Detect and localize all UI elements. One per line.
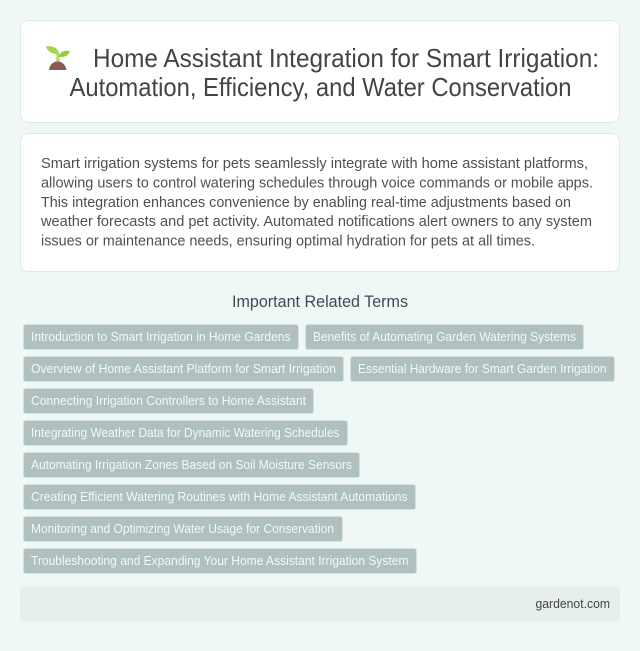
- chip: connecting controllers: Connecting Irrigation Controllers to Home Assistant: [31, 393, 306, 408]
- chip: irrigation zones: Automating Irrigation Zones Based on Soil Moisture Sensors: [31, 457, 352, 472]
- chip: introduction: [24, 324, 298, 350]
- panel: description: [20, 134, 620, 272]
- chip: monitoring: Monitoring and Optimizing Water Usage for Conservation: [31, 521, 334, 536]
- title: Home Assistant Integration for Smart Irrigation:: [93, 43, 599, 73]
- heading: important related terms: Important Related Terms: [232, 293, 408, 311]
- icon: seedling: [46, 46, 70, 70]
- chip: watering routines: Creating Efficient Watering Routines with Home Assistant Automations: [31, 489, 408, 504]
- chip: overview: [24, 356, 344, 382]
- chip: overview: Overview of Home Assistant Platform for Smart Irrigation: [31, 361, 336, 376]
- chip: benefits: Benefits of Automating Garden Watering Systems: [313, 329, 576, 344]
- footer text: site name: gardenot.com: [536, 596, 610, 611]
- text block: description paragraph: allowing users to control watering schedules through voice commands or mobile apps.: [41, 174, 593, 191]
- footer bar: [20, 587, 620, 621]
- chip: introduction: Introduction to Smart Irrigation in Home Gardens: [31, 329, 290, 344]
- chip: weather data: Integrating Weather Data for Dynamic Watering Schedules: [31, 425, 340, 440]
- text block: description paragraph: [40, 155, 593, 250]
- panel: title header: [20, 20, 620, 122]
- title: [70, 43, 599, 102]
- chip: monitoring: [24, 516, 342, 542]
- chip: weather data: [24, 420, 348, 446]
- chip: essential hardware: Essential Hardware for Smart Garden Irrigation: [358, 361, 606, 376]
- text block: description paragraph: Smart irrigation systems for pets seamlessly integrate with home assistant platforms,: [41, 155, 588, 172]
- text block: description paragraph: This integration enhances convenience by enabling real-time adjustments based on: [41, 194, 571, 211]
- chip: troubleshooting: [24, 548, 416, 574]
- chip: irrigation zones: [24, 452, 360, 478]
- text block: description paragraph: issues or maintenance needs, ensuring optimal hydration for pets at all times.: [41, 232, 535, 250]
- chip: troubleshooting: Troubleshooting and Expanding Your Home Assistant Irrigation System: [31, 553, 408, 568]
- related terms chips: [24, 324, 614, 574]
- chip: essential hardware: [350, 356, 614, 382]
- text block: description paragraph: weather forecasts and pet activity. Automated notifications alert owners to any system: [40, 213, 592, 230]
- title: Automation, Efficiency, and Water Conservation: [70, 72, 572, 102]
- chip: connecting controllers: [24, 388, 314, 414]
- chip: benefits: [306, 324, 584, 350]
- chip: watering routines: [24, 484, 416, 510]
